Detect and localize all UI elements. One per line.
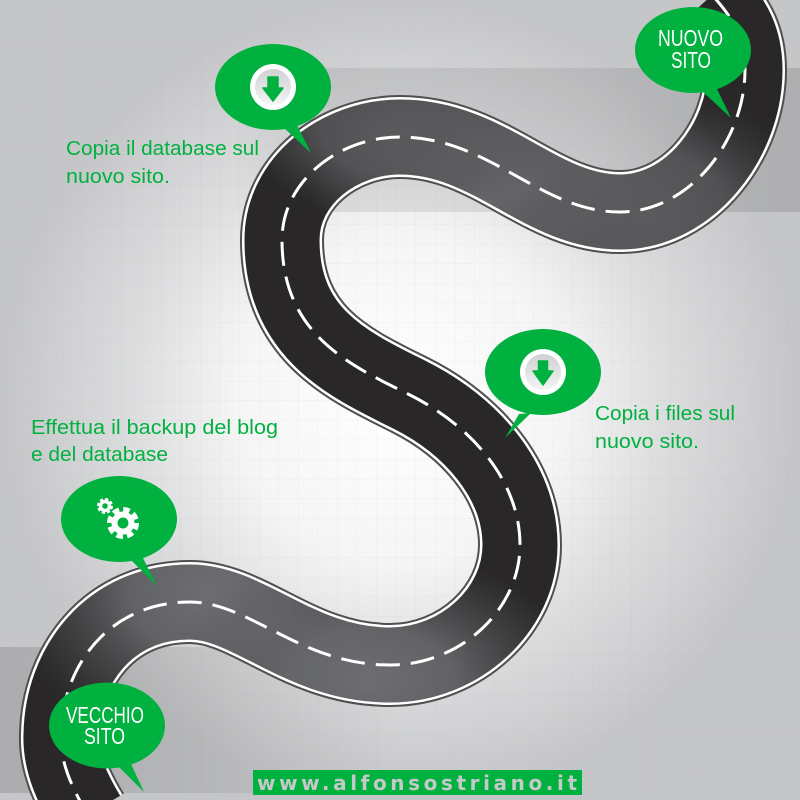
text: effettua il backup: e del database [31, 443, 168, 466]
bubble: gears [61, 476, 177, 586]
bubble: vecchio sito: VECCHIO [66, 702, 144, 728]
text: copia il database: Copia il database sul [66, 137, 259, 160]
bubble: download files [485, 329, 601, 438]
bubble: vecchio sito: SITO [84, 723, 125, 749]
text: copia i files: nuovo sito. [595, 430, 699, 453]
text: copia i files [595, 402, 735, 453]
bubble: nuovo sito [635, 7, 751, 118]
text: copia i files: Copia i files sul [595, 402, 735, 425]
text: copia il database: nuovo sito. [66, 165, 170, 188]
bubble: nuovo sito: SITO [671, 47, 711, 73]
website label: www.alfonsostriano.it [257, 771, 577, 795]
text: copia il database [66, 137, 259, 188]
text: effettua il backup [31, 416, 278, 466]
icon: gears [98, 500, 136, 536]
text: effettua il backup: Effettua il backup del blog [31, 416, 278, 439]
bubble: nuovo sito: NUOVO [658, 25, 723, 51]
bubble: download database [215, 44, 331, 153]
bubble: vecchio sito [49, 682, 165, 792]
